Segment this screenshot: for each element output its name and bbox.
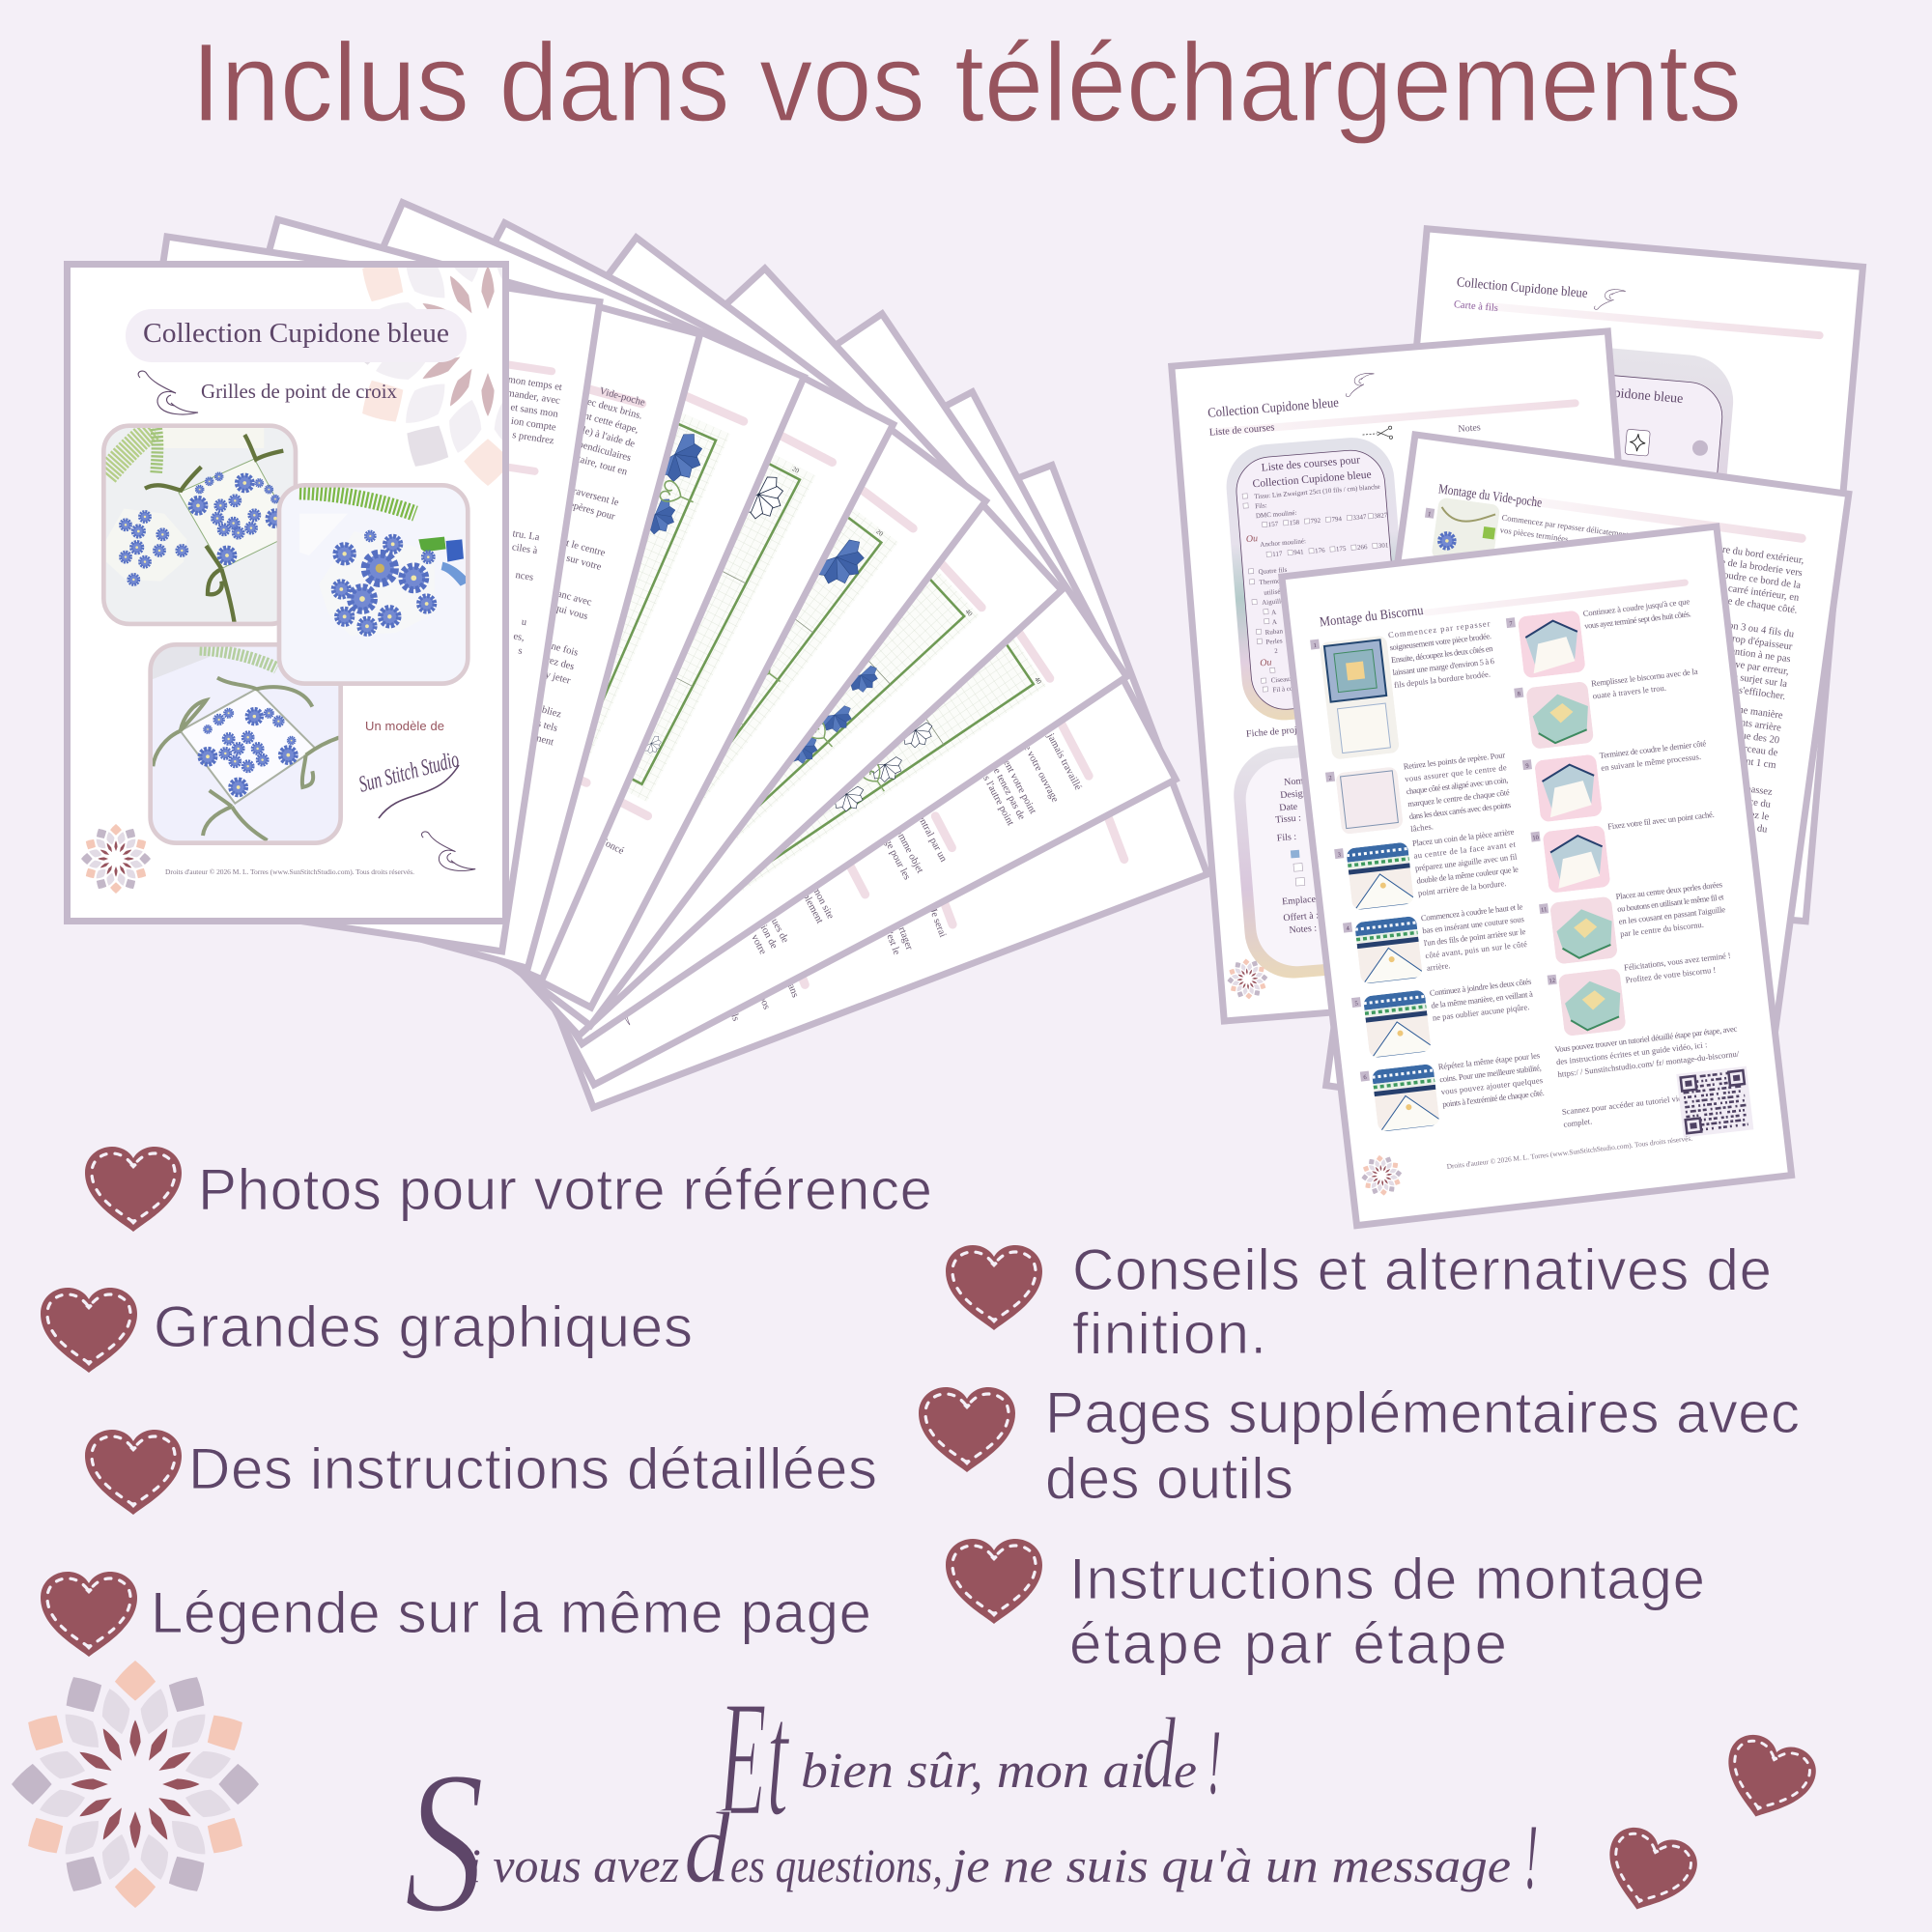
page 1: instructions text: s prendrez [512,430,555,446]
cover: designer label: Un modèle de [365,719,444,733]
heading bar [1437,482,1806,547]
page 1: instructions text: mon temps et [507,375,563,393]
right column step text: en suivant le même processus. [1601,752,1701,773]
right column text: nière que pour le carré intérieur, en [1657,574,1801,604]
step 7 photo [1518,610,1586,678]
left column step text: ne pas oublier aucune piqûre. [1432,1002,1530,1023]
project sheet frame: Date [1279,802,1298,813]
step number labels: 2 [1328,775,1332,781]
cover title pill: Collection Cupidone bleue [143,318,449,349]
page 8: text page: rage pour les [878,831,912,882]
step text [1499,512,1630,552]
page 1: instructions text: es, [513,632,526,643]
bullet: extra pages: des outils [1045,1446,1293,1511]
step number labels [1313,619,1564,1081]
heading bar: Montage du Biscornu [1319,604,1424,630]
tutorial note [1554,1024,1747,1129]
right column step text [1582,596,1733,984]
project sheet frame: Tissu : [1275,812,1301,826]
page 2: instructions Vide-poche: ntaire, tout en [571,453,629,478]
right column text [1624,536,1805,836]
icon: flourish [1345,373,1376,397]
right column text: cela arrive par erreur, [1702,655,1789,677]
step 12 photo [1558,968,1627,1037]
shopping list frame: Thermocollant [1259,576,1299,586]
page 5: chart grid with flower and ornament: 20 [874,527,885,538]
shopping list frame: Collection Cupidone bleue [1252,469,1372,490]
icon: scissors [1362,426,1393,441]
page 9: text page, most rotated: Je serai [927,907,948,939]
left column step text: fils depuis la bordure brodée. [1393,668,1491,690]
step number labels: 7 [1509,620,1514,628]
icon: flourish [138,371,198,414]
project sheet frame: Fils : [1276,832,1296,844]
page 2: instructions Vide-poche: ant cette étape, [579,410,639,436]
bullet: assembly: étape par étape [1069,1611,1507,1676]
script line 1: d [1143,1696,1176,1809]
heading: Collection Cupidone bleue [1208,396,1339,421]
page 8: text page: ir mon site [806,877,836,922]
page 1: instructions text: s [518,645,523,657]
tutorial note: Vous pouvez trouver un tutoriel détaillé étape par étape, avec [1554,1024,1738,1054]
step number labels: 5 [1354,1000,1358,1008]
page 2: instructions Vide-poche: y jeter [544,669,572,687]
project sheet frame: Notes : [1289,923,1317,936]
right column step text: Remplissez le biscornu avec de la [1591,667,1698,688]
project sheet frame [1230,735,1441,981]
tutorial note: complet. [1563,1116,1593,1129]
page 1: instructions text: u [521,617,528,628]
photo: biscornu and tray [101,423,298,626]
bullet: photos: Photos pour votre référence [198,1157,932,1222]
icon: small mandala [1359,1153,1405,1198]
bullet: charts: Grandes graphiques [154,1294,693,1359]
icon: heart 4 [41,1572,137,1657]
left column step text: laissant une marge d'environ 5 à 6 [1392,656,1495,677]
bullet: assembly [1069,1547,1705,1676]
cover title pill [126,309,467,362]
left column step text: Continuez à joindre les deux côtés [1429,977,1532,998]
project sheet frame: Emplacement [1282,893,1336,907]
page 1: instructions text: tru. La [512,528,540,543]
right column text: arrière de chaque côté. [1706,593,1798,616]
page 5: chart grid with flower and ornament [241,238,985,1026]
text: ! [1208,1711,1221,1813]
right column step text: en les cousant en passant l'aiguille [1618,904,1726,926]
icon: heart 5 [946,1245,1042,1330]
right column text: lisant 1 cm [1731,754,1776,771]
shopping list frame: Fils: [1255,501,1267,510]
page 1: instructions text: nces [515,570,534,583]
page 8: text page: ement votre point [995,748,1037,816]
shopping list frame: utilisé [1264,587,1281,597]
notes label: Notes [1458,422,1481,435]
text: ! [1524,1805,1538,1908]
page 2: instructions Vide-poche: blanc avec [549,586,593,609]
script line 1 [718,1667,1221,1851]
left column step text: Répétez la même étape pour les [1437,1050,1541,1071]
page 1: instructions text: ion compte [510,416,557,434]
right column text: éviter trop d'épaisseur [1703,630,1793,652]
project sheet frame: Offert à : [1283,910,1319,923]
page 3: colour chart grid [141,203,804,980]
step 1 photo [1320,636,1400,760]
left column step text: coins. Pour une meilleure stabilité, [1439,1063,1542,1084]
QR code [1676,1066,1753,1138]
page 9: text page, most rotated: dans [783,978,800,999]
right column text: points de surjet sur la [1700,668,1788,690]
script line 2: d [684,1791,730,1904]
left column step text: double de la même couleur que le [1416,864,1519,886]
right column text: nous allons coudre ce bord de la [1670,563,1802,591]
left column step text: Ensuite, découpez les deux côtés en [1390,643,1494,665]
shopping list frame: A [1272,618,1277,626]
step 1 number [1425,508,1435,519]
page 1: instructions text: mander, avec [506,388,561,407]
left column step text: côté avant, puis un sur le côté [1425,939,1527,960]
step 8 photo [1525,681,1594,750]
left column step text: dans les deux carrés avec des points [1408,800,1512,821]
left column step text: vous assurer que le centre de [1405,762,1507,783]
tutorial note: Scannez pour accéder au tutoriel vidéo [1561,1093,1690,1117]
shopping list frame [1223,435,1413,724]
page 2: instructions Vide-poche: qui vous [553,603,589,622]
page 2: instructions Vide-poche: repères pour [565,499,616,523]
left column step text: vous pouvez ajouter quelques [1440,1075,1544,1096]
decorative mandala on cover [362,268,502,486]
right column step text: Félicitations, vous avez terminé ! [1624,951,1731,972]
shopping list frame: 3827 [1374,511,1388,520]
heading bar: Montage du Vide-poche [1437,482,1543,511]
page 8: text page: ques de [767,913,790,945]
shopping list frame: 157 [1267,520,1279,528]
page 8: text page: tion de [756,921,780,951]
step number labels: 1 [1313,642,1317,649]
bullet: finishing tips [1072,1237,1772,1366]
fan of sample pages [70,203,1208,1107]
page 9: text page, most rotated: ils [727,1009,741,1023]
page 2: instructions Vide-poche: nt le centre [560,537,607,559]
shopping list frame: 2 [1274,647,1279,655]
step number labels: 4 [1346,925,1350,932]
step 10 photo [1543,825,1610,894]
page 2: instructions Vide-poche: ls sur votre [556,551,603,573]
sub-heading bar [1453,299,1824,342]
tutorial note: des instructions écrites et un guide vidéo, ici : [1555,1039,1708,1066]
right column step text: ouate à travers le trou. [1592,683,1666,700]
left column step text: bas en insérant une couture sous [1422,914,1525,935]
right column text: pièce du [1736,795,1772,810]
panel: thread card page [1370,229,1862,922]
icon: tilted heart upper [1714,1728,1822,1831]
shopping list frame: Aiguilles [1262,597,1287,607]
page 8: text page: uis l'autre point [977,767,1015,828]
shopping list frame: Tissu: Lin Zweigart 25ct (10 fils / cm) blanche [1254,483,1380,500]
page 2: instructions Vide-poche: ille) à l'aide de [576,424,637,450]
shopping list frame: Ruban [1264,627,1284,637]
page 2: instructions Vide-poche: Vide-poche [598,386,646,409]
script line 2: es questions, [730,1838,943,1892]
page 9: text page, most rotated: partager [893,917,915,952]
page 1: instructions text: et sans mon [510,402,559,420]
page 9: text page, most rotated [438,466,1208,1107]
shopping list frame: Perles [1265,637,1283,646]
page 8: text page: avez jamais travaillé [1035,713,1083,792]
step 2 photo [1335,766,1404,835]
script line 1: bien sûr, mon ai [801,1744,1145,1799]
panel: cover page [64,261,509,924]
page 1: instructions text: ciles à [511,542,538,556]
icon: heart 6 [919,1387,1015,1472]
bullet: instructions: Des instructions détaillées [188,1436,877,1501]
page 2: instructions Vide-poche: rpendiculaires [574,439,632,464]
cover: studio signature: Sun Stitch Studio [356,747,462,798]
step number labels: 9 [1525,762,1529,770]
shopping list frame: Ciseaux [1270,675,1293,684]
step number labels: 8 [1517,691,1520,697]
cover: studio signature [356,747,462,818]
left column step text: points à l'extrémité de chaque côté. [1442,1088,1545,1109]
page 4: symbol chart grid: rs Foncé [590,832,626,857]
page 8: text page: s, ne tenez pas de [984,754,1027,822]
left column step text: lâches. [1410,821,1434,834]
right column step text: Profitez de votre biscornu ! [1625,965,1717,984]
page 6: chart grid, blue flowers [282,269,1062,1036]
left column step text: Retirez les points de repère. Pour [1403,750,1506,771]
page 8: text page: de votre [743,923,768,956]
sub-heading bar [1208,398,1579,439]
photo: biscornu close-up [279,485,470,684]
bullet: finishing tips: Conseils et alternatives de [1072,1237,1772,1302]
script line 1: Et [718,1667,790,1851]
right column step text: Terminez de coudre le dernier côté [1599,738,1707,760]
step number labels: 10 [1532,835,1539,842]
page 8: text page: central par un [913,810,949,865]
tutorial note: https:/ / Sunstitchstudio.com/ fr/ montage-du-biscornu/ [1557,1048,1740,1079]
thread card frame: Collection Cupidone bleue [1538,380,1684,407]
step numbers [1310,616,1566,1082]
shopping list frame: Quatre fils [1258,566,1288,576]
left column step text: Placez un coin de la pièce arrière [1411,827,1515,848]
icon: heart 3 [85,1430,182,1515]
bullet: legend: Légende sur la même page [151,1580,871,1645]
page 2: instructions Vide-poche [105,219,700,968]
left column step text: soigneusement votre pièce brodée. [1389,631,1492,652]
step text: vos pièces terminées [1499,525,1570,544]
left column step text: de la même manière, en veillant à [1431,989,1533,1010]
sub-heading bar: Carte à fils [1453,299,1498,314]
icon: heart 7 [946,1539,1042,1624]
page 4: symbol chart grid [203,223,894,1008]
left column step text: arrière. [1426,960,1451,973]
page 1: instructions text [70,237,600,952]
step 6 photo [1372,1064,1440,1132]
thread card frame [1509,342,1737,744]
page 2: instructions Vide-poche: avec deux brins. [577,394,643,422]
photo: tray with ribbons [148,642,343,845]
page 2: instructions Vide-poche: es tels [531,717,558,734]
shopping list frame: Fil à coudre [1272,684,1305,694]
shopping list frame: 158 [1289,519,1300,526]
right column text: s points arrière [1720,715,1782,734]
script line 2 [404,1728,1538,1932]
left column step text: l'un des fils de point arrière sur le [1423,926,1526,948]
step number labels: 12 [1548,978,1555,985]
page 2: instructions Vide-poche: ment [532,732,554,748]
right column step text: ou boutons en utilisant le même fil et [1617,892,1725,914]
shopping list frame: 266 [1357,543,1368,552]
shopping list frame: 301 [1378,541,1389,550]
page 9: text page, most rotated: pos [756,994,772,1011]
script line 2: je ne suis qu'à un message [945,1838,1511,1892]
step number labels: 3 [1337,851,1341,859]
step 1 number: 1 [1427,510,1432,518]
right column text: pez le [1745,809,1770,823]
shopping list frame: Liste des courses pour [1261,454,1361,474]
right column step text: vous ayez terminé sept des huit côtés. [1584,609,1691,631]
left column step text: préparez une aiguille avec un fil [1414,851,1518,873]
panel: Biscornu assembly page [1282,526,1792,1226]
shopping list frame: A [1271,609,1276,616]
step number labels: 6 [1363,1074,1368,1081]
icon: flourish [1594,288,1626,312]
script line 2: i vous avez [468,1838,679,1892]
shopping list frame: 792 [1310,517,1321,526]
bullet: extra pages: Pages supplémentaires avec [1045,1380,1800,1445]
right column text: passez [1746,783,1774,798]
page 4: symbol chart grid: 20 [791,465,801,475]
left column step text: Commencez à coudre le haut et le [1420,901,1523,923]
shopping list frame: 3347 [1352,513,1367,522]
step 9 photo [1534,753,1603,822]
right column text: de la couture du bord extérieur, [1678,538,1804,566]
shopping list frame: Anchor mouliné: [1260,537,1306,549]
bullet: extra pages [1045,1380,1800,1511]
left column step text: marquez le centre de chaque côté [1407,787,1510,809]
project sheet heading: Fiche de projet [1246,724,1305,740]
bullet: assembly: Instructions de montage [1069,1547,1705,1611]
page 8: text page: re de votre ouvrage [1014,729,1061,805]
shopping list frame: DMC mouliné: [1256,509,1297,520]
icon: tilted heart lower [1595,1821,1703,1923]
page 8: text page: hoplement [796,883,825,925]
right column text: morceau de [1730,742,1778,758]
left column step text: chaque côté est aligné avec un coin, [1406,775,1509,796]
page 7: chart grid, outlined flowers [337,314,1126,1044]
icon: heart 2 [41,1288,137,1373]
icon: small mandala [81,824,151,894]
panel: shopping list page [1172,331,1661,1021]
step 4 photo [1354,916,1423,984]
shopping list frame: 175 [1336,545,1347,554]
project sheet frame: Design [1280,788,1308,801]
step 5 photo [1363,989,1432,1058]
copyright: Droits d'auteur © 2026 M. L. Torres (www.SunStitchStudio.com). Tous droits réservés. [1446,1134,1693,1171]
right column step text: Fixez votre fil avec un point caché. [1607,810,1715,831]
icon: large mandala [12,1661,259,1908]
step 1 photo [1432,498,1499,556]
right column text: ce du [1745,822,1769,836]
shopping list frame: Ou [1245,533,1259,545]
left column step text [1387,618,1546,1109]
cover: copyright: Droits d'auteur © 2026 M. L. Torres (www.SunStitchStudio.com). Tous droits réservés. [165,867,414,876]
left column step text: point arrière de la bordure. [1417,878,1507,897]
step text: Commencez par repasser délicatement [1501,512,1630,539]
page 8: text page [390,392,1176,1085]
right column text: même manière [1722,702,1784,722]
step 11 photo [1549,896,1618,965]
right column step text: Continuez à coudre jusqu'à ce que [1582,596,1690,618]
heading bar [1319,573,1689,630]
left column step text: Commencez par repasser [1387,618,1491,639]
left column step text: au centre de la face avant et [1413,839,1517,861]
title: Inclus dans vos téléchargements [191,21,1742,145]
page 2: instructions Vide-poche: traversent le [569,485,620,508]
shopping list frame: 941 [1293,548,1304,556]
page 8: text page: comme objet [891,823,925,875]
step 3 photo [1346,841,1414,910]
bullet: finishing tips: finition. [1072,1301,1266,1366]
shopping list frame: 794 [1331,515,1343,524]
panel: Vide-poche assembly page [1326,435,1849,1145]
right column text: environ 3 ou 4 fils du [1707,617,1795,640]
step number labels: 11 [1541,906,1548,914]
page 7: chart grid, outlined flowers: 40 [1033,675,1043,686]
page 2: instructions Vide-poche: Une fois [543,639,580,659]
icon: small mandala [1226,957,1269,1001]
icon: heart 1 [85,1147,182,1232]
right column step text: par le centre du biscornu. [1620,920,1704,939]
icon: flourish bottom right [422,832,475,870]
right column text: es attention à ne pas [1709,643,1791,665]
page 6: chart grid, blue flowers: 40 [964,608,975,618]
cover subtitle: Grilles de point de croix [201,380,397,403]
heading: Collection Cupidone bleue [1456,275,1588,301]
right column text: partie extérieure de la broderie vers [1659,549,1803,579]
shopping list frame: 176 [1315,547,1325,554]
shopping list frame: Ou [1260,657,1272,668]
right column text: au de s'effilocher. [1714,682,1786,702]
page 2: instructions Vide-poche: rerez des [537,653,576,672]
sub-heading bar: Liste de courses [1208,422,1275,439]
shopping list frame: 117 [1272,550,1283,558]
project sheet frame: Nom : [1284,776,1309,788]
page 9: text page, most rotated: c'est le [882,927,902,956]
page 2: instructions Vide-poche: ubliez [536,703,563,721]
right column step text: Placez au centre deux perles dorées [1615,879,1723,901]
script line 1: e [1174,1744,1197,1799]
right column text: arque des 20 [1728,728,1780,746]
